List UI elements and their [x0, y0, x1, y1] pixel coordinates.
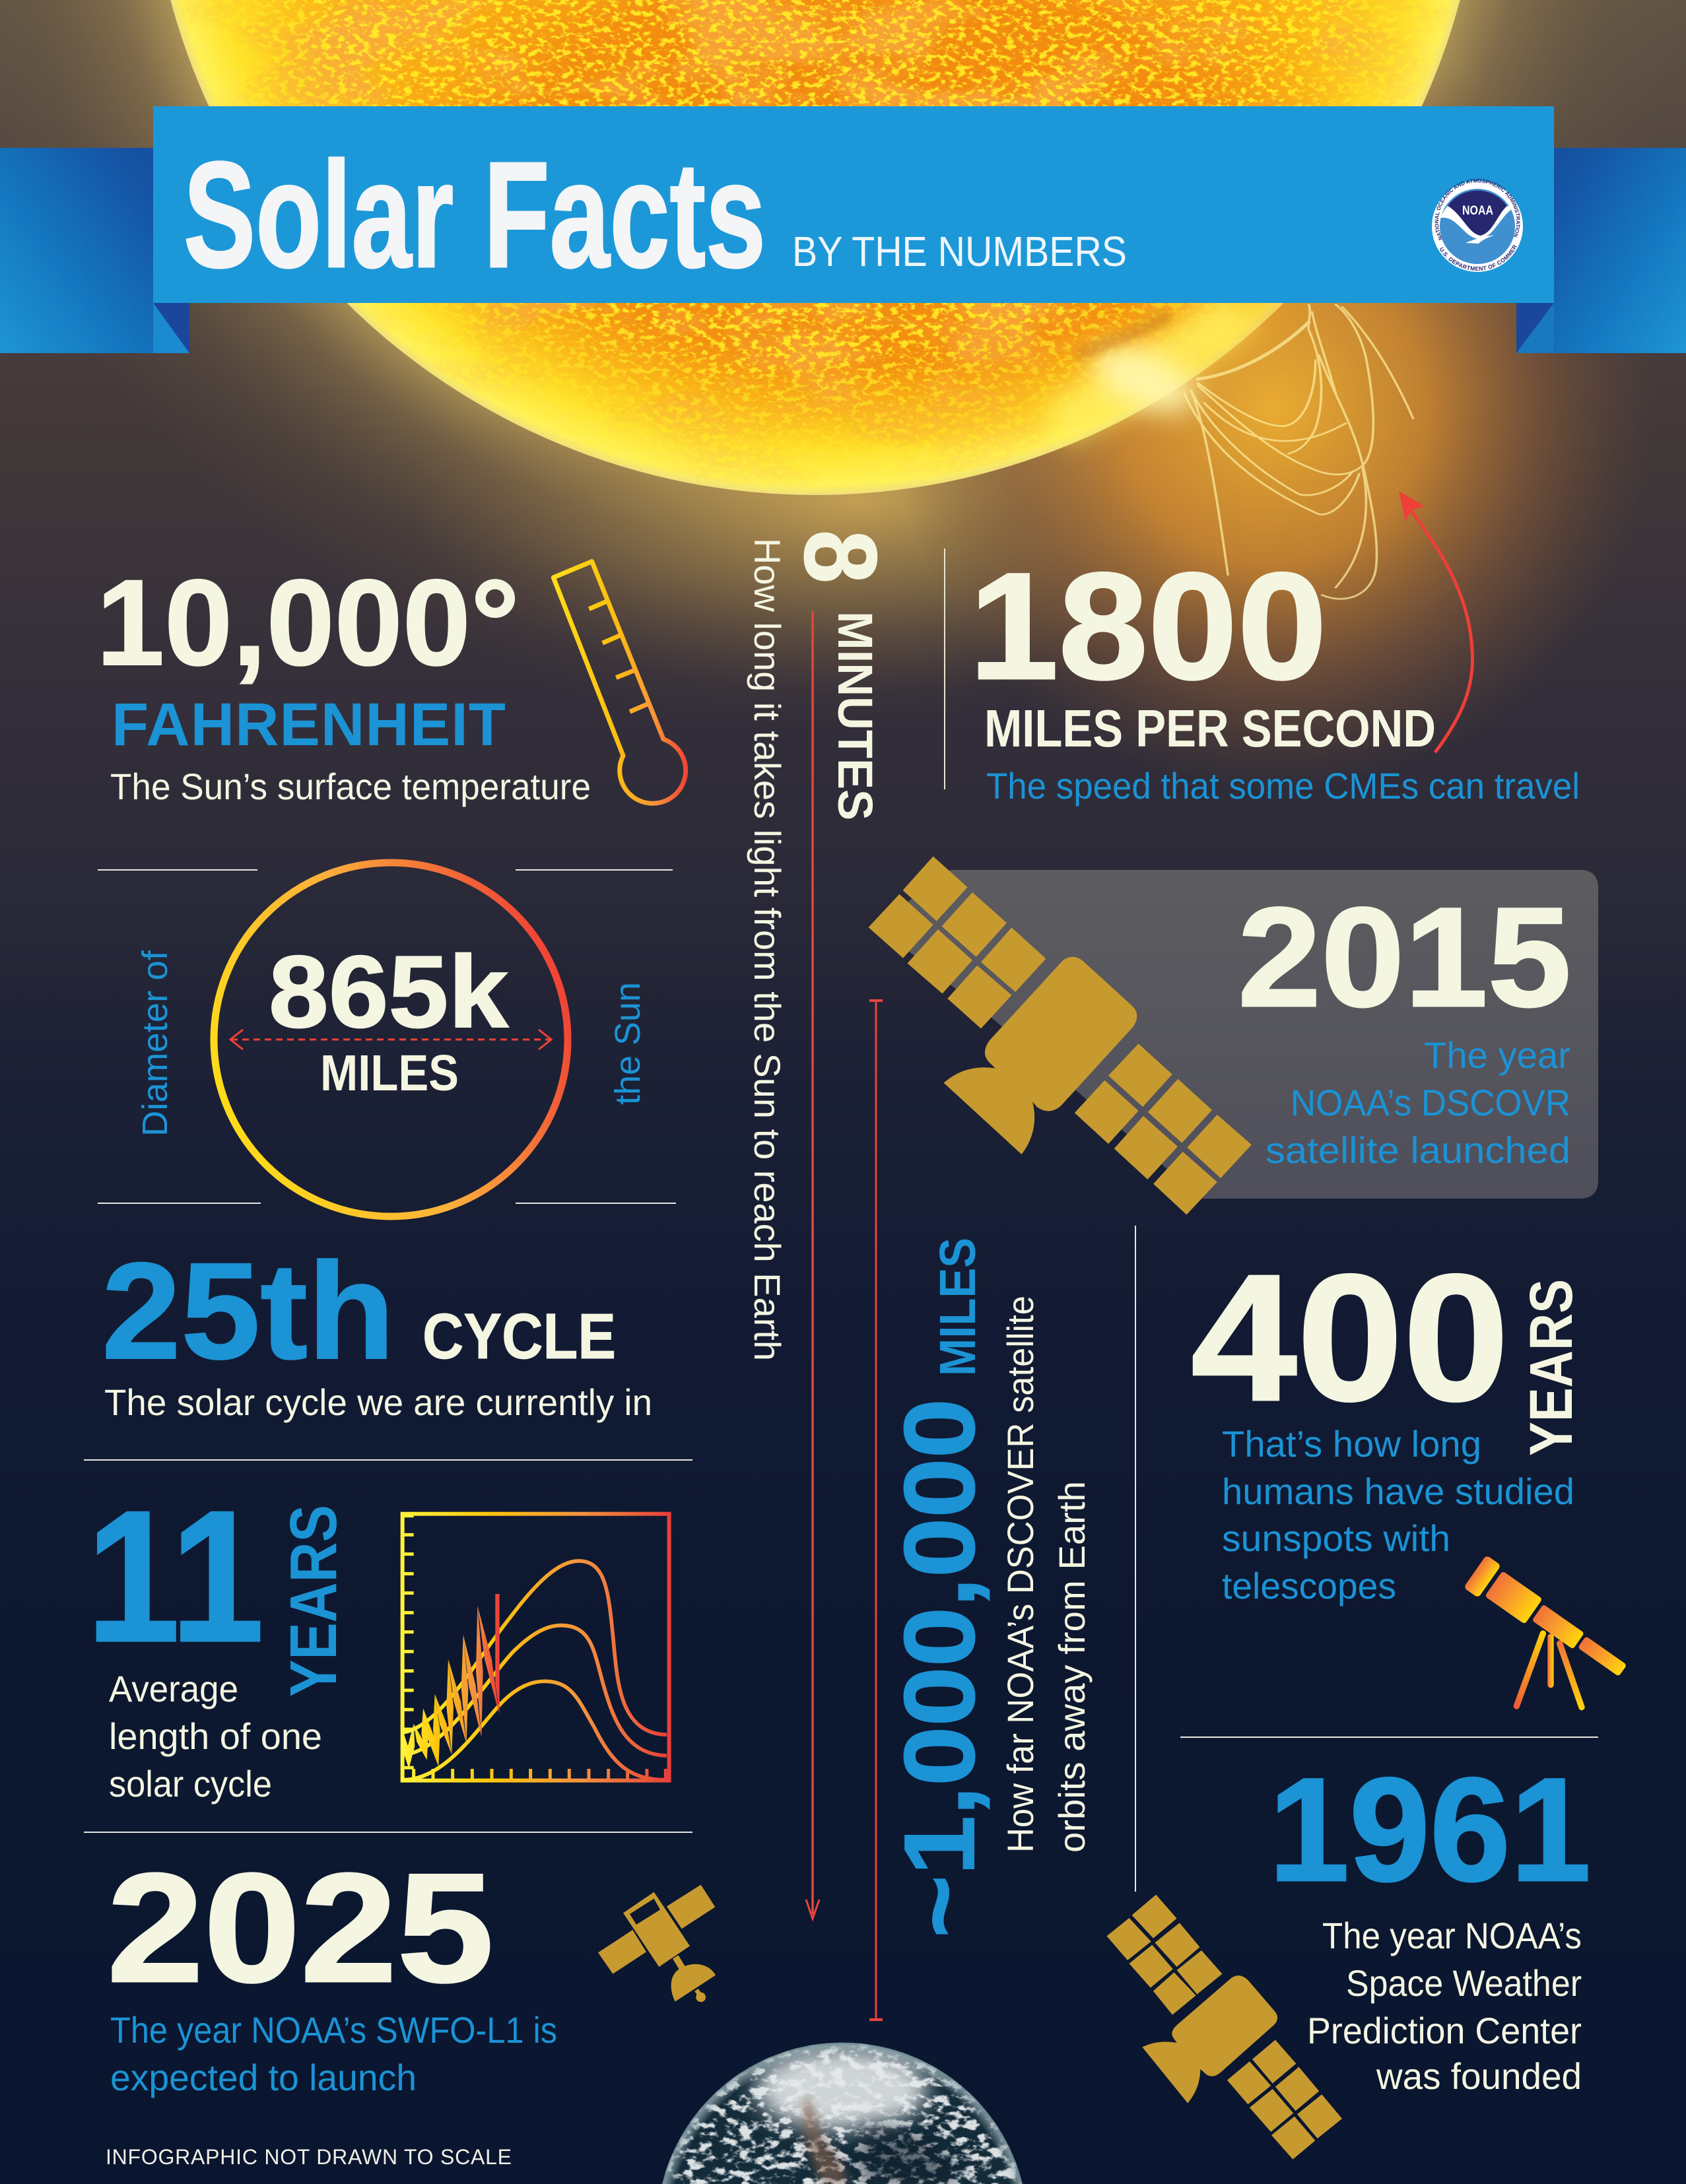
- caption: humans have studied: [1222, 1471, 1574, 1512]
- unit: CYCLE: [422, 1300, 616, 1372]
- stat: SWPC founding: [1269, 1748, 1591, 2097]
- caption: The year NOAA’s SWFO-L1 is: [110, 2009, 557, 2051]
- caption: The year NOAA’s: [1322, 1915, 1582, 1956]
- unit: FAHRENHEIT: [112, 691, 506, 758]
- stat: DSCOVR distance: [883, 1238, 1093, 1938]
- caption: was founded: [1376, 2055, 1582, 2097]
- number: ~1,000,000: [883, 1399, 995, 1938]
- caption: The Sun’s surface temperature: [110, 766, 591, 807]
- caption: sunspots with: [1222, 1517, 1450, 1559]
- arrow: sun to earth: [806, 611, 819, 1919]
- stat: solar cycle: [102, 1235, 652, 1423]
- icon: small satellite with dish: [598, 1885, 716, 2002]
- stat: light travel time: [747, 530, 898, 1919]
- title: Solar Facts: [184, 131, 766, 299]
- number: 865k: [269, 935, 509, 1049]
- subtitle: BY THE NUMBERS: [792, 228, 1127, 275]
- icon: NOAA logo: NATIONAL OCEANIC AND ATMOSPHERIC ADMINISTRATION: [1434, 178, 1520, 240]
- earth: [662, 2043, 1023, 2184]
- unit: YEARS: [277, 1505, 351, 1697]
- icon: NOAA logo: U.S. DEPARTMENT OF COMMERCE: [1440, 245, 1517, 271]
- arrow: CME curve: [1399, 491, 1473, 752]
- title banner: [153, 106, 1554, 303]
- number: 400: [1191, 1237, 1509, 1438]
- stat: sun diameter: [135, 863, 648, 1216]
- caption: [1265, 1034, 1570, 1171]
- caption: expected to launch: [110, 2057, 417, 2098]
- divider lines around circle: [98, 870, 676, 1203]
- caption: That’s how long: [1222, 1423, 1481, 1465]
- label: the Sun: [608, 982, 648, 1105]
- number: 2025: [107, 1841, 494, 2014]
- icon: SWPC satellite: [1107, 1895, 1342, 2160]
- chart: solar cycle curves: [403, 1514, 669, 1781]
- circle: [214, 863, 568, 1216]
- caption: How far NOAA’s DSCOVER satellite: [999, 1296, 1041, 1853]
- icon: DSCOVR satellite: [869, 856, 1252, 1214]
- caption: telescopes: [1222, 1565, 1396, 1606]
- caption: orbits away from Earth: [1051, 1481, 1093, 1853]
- number: 11: [86, 1472, 264, 1680]
- stat: sunspot study: [1191, 1237, 1585, 1606]
- sun: [0, 0, 1686, 792]
- unit: MILES PER SECOND: [984, 699, 1436, 758]
- caption: [1307, 1915, 1582, 2097]
- number: 10,000°: [96, 555, 520, 691]
- caption: The speed that some CMEs can travel: [986, 765, 1580, 807]
- stat: cycle length: [86, 1472, 351, 1804]
- ribbon: right tail: [1516, 148, 1686, 353]
- caption: Space Weather: [1346, 1962, 1582, 2004]
- caption: [999, 1296, 1093, 1853]
- caption: [109, 1668, 322, 1804]
- icon: NOAA logo: [1432, 178, 1523, 272]
- panel: DSCOVR launch: [904, 870, 1598, 1199]
- stat: CME speed: [969, 491, 1580, 807]
- icon: telescope: [1464, 1555, 1627, 1707]
- icon: NOAA logo: NOAA: [1462, 204, 1493, 218]
- unit: MINUTES: [828, 611, 883, 820]
- caption: [1222, 1423, 1574, 1606]
- caption: solar cycle: [109, 1763, 272, 1804]
- number: 25th: [102, 1235, 395, 1388]
- stat: surface temperature: [96, 555, 591, 807]
- stat: SWFO-L1 launch: [107, 1841, 557, 2098]
- arrow: diameter: [230, 1030, 551, 1049]
- footnote: INFOGRAPHIC NOT DRAWN TO SCALE: [106, 2145, 512, 2169]
- caption: length of one: [109, 1715, 322, 1757]
- number: 1800: [969, 541, 1327, 711]
- caption: The solar cycle we are currently in: [104, 1381, 652, 1423]
- caption: Average: [109, 1668, 238, 1709]
- icon: thermometer: [553, 562, 686, 803]
- caption: satellite launched: [1265, 1129, 1570, 1171]
- caption: [110, 2009, 557, 2098]
- unit: MILES: [929, 1238, 986, 1376]
- label: Diameter of: [135, 950, 175, 1137]
- caption: How long it takes light from the Sun to reach Earth: [747, 538, 788, 1361]
- caption: The year: [1424, 1034, 1570, 1076]
- caption: Prediction Center: [1307, 2010, 1582, 2051]
- caption: NOAA’s DSCOVR: [1291, 1082, 1570, 1123]
- unit: YEARS: [1518, 1279, 1585, 1456]
- arrow: distance to DSCOVR: [869, 1000, 883, 2020]
- number: 2015: [1238, 878, 1571, 1036]
- number: 1961: [1269, 1748, 1591, 1912]
- ribbon: left tail: [0, 148, 189, 353]
- unit: MILES: [320, 1045, 459, 1102]
- number: 8: [784, 530, 898, 583]
